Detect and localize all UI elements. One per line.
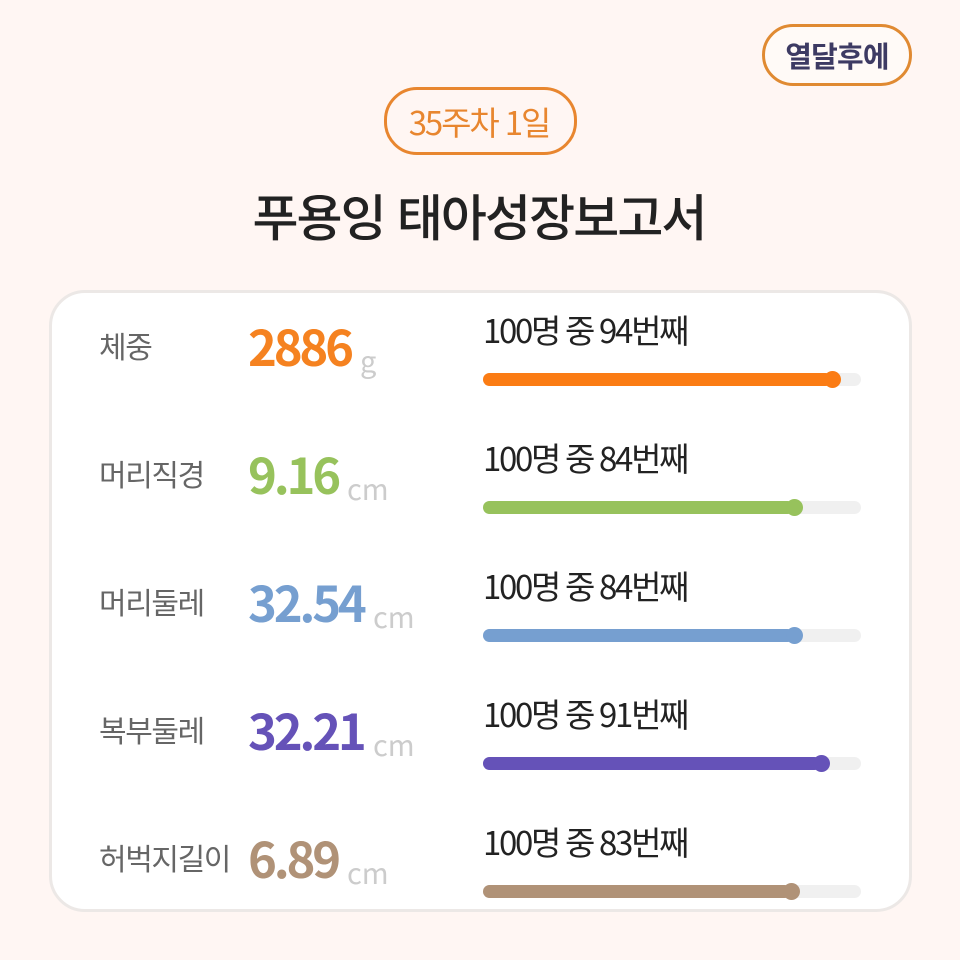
- row: abdominal circumference: [99, 689, 861, 772]
- progress bar: [483, 372, 861, 386]
- progress bar: [483, 628, 861, 642]
- label: 머리둘레: [99, 579, 204, 623]
- value: 6.89: [248, 822, 338, 893]
- title: 푸용잉 태아성장보고서: [252, 179, 706, 251]
- week badge: [384, 87, 577, 155]
- rank text: 100명 중 94번째: [483, 305, 687, 353]
- panel: growth report: [49, 290, 912, 912]
- week badge: 35주차 1일: [409, 97, 549, 145]
- progress bar: [483, 884, 861, 898]
- unit: cm: [347, 851, 389, 893]
- value: 9.16: [248, 438, 338, 509]
- row: head diameter: [99, 433, 861, 516]
- brand badge: [762, 24, 912, 86]
- rank text: 100명 중 83번째: [483, 817, 687, 865]
- label: 체중: [99, 323, 151, 367]
- label: 복부둘레: [99, 707, 204, 751]
- value: 2886: [248, 310, 351, 381]
- progress bar: [483, 500, 861, 514]
- rank text: 100명 중 91번째: [483, 689, 687, 737]
- unit: cm: [373, 595, 415, 637]
- unit: cm: [373, 723, 415, 765]
- label: 머리직경: [99, 451, 204, 495]
- row: weight: [99, 305, 861, 388]
- brand badge: 열달후에: [785, 34, 889, 76]
- rank text: 100명 중 84번째: [483, 433, 687, 481]
- value: 32.54: [248, 566, 364, 637]
- unit: g: [360, 339, 376, 381]
- label: 허벅지길이: [99, 835, 230, 879]
- row: head circumference: [99, 561, 861, 644]
- rank text: 100명 중 84번째: [483, 561, 687, 609]
- value: 32.21: [248, 694, 364, 765]
- unit: cm: [347, 467, 389, 509]
- progress bar: [483, 756, 861, 770]
- row: femur length: [99, 817, 861, 900]
